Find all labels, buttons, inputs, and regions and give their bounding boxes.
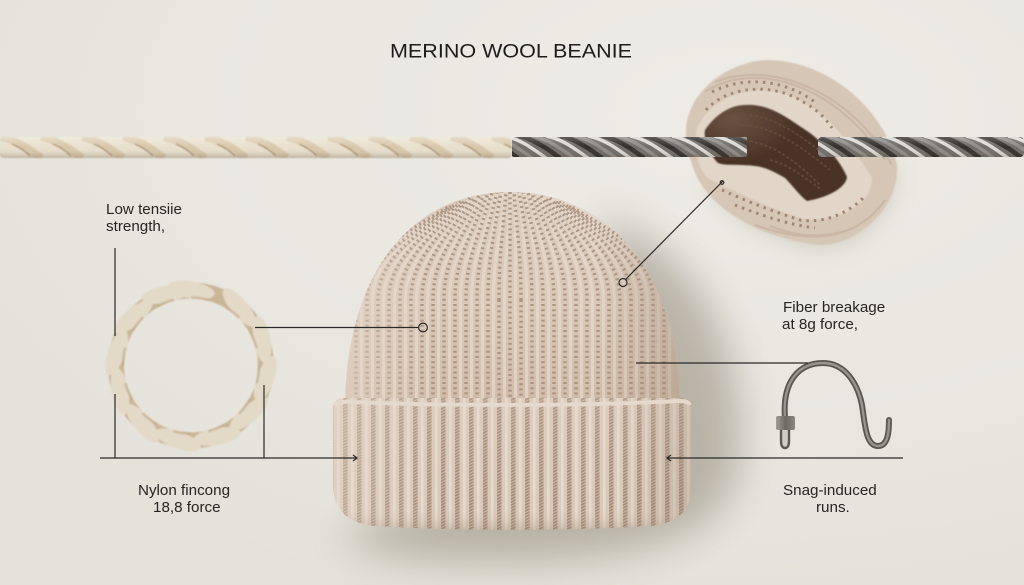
right arrow to cuff [667,455,903,461]
title: MERINO WOOL BEANIE [390,42,632,62]
crown stitch dots [356,192,664,410]
twisted fibre ring [100,277,282,456]
cuff shading [333,398,691,530]
callout: fiber breakage: Fiber breakage [783,299,885,316]
small beanie knit rim [696,90,872,220]
beanie cuff [333,398,691,530]
callout: low tensile strength [106,201,182,235]
callout: low tensile strength: strength, [106,218,165,235]
main beanie [333,192,691,530]
ring strands [100,277,282,456]
callout: snag-induced runs: Snag-induced [783,482,877,499]
small beanie diagonal leader [626,181,723,279]
callout: fiber breakage: at 8g force, [782,316,858,333]
callout: nylon fincong: 18,8 force [153,499,221,516]
small beanie shadow [700,165,898,250]
small beanie knit stitches [706,82,864,228]
small beanie body [686,60,897,245]
callout: snag-induced runs: runs. [816,499,850,516]
natural fibre rope [0,137,512,158]
crown side shading [346,232,680,398]
callout: snag-induced runs [783,482,877,516]
left vertical leader bottom [114,394,116,458]
small beanie end circle [720,181,724,184]
hook highlight [785,363,889,446]
callout: nylon fincong [138,482,230,516]
diagonal leader end circle [619,278,627,286]
ring to beanie leader [255,326,418,328]
hook collar [776,416,795,430]
left vertical leader top [114,248,116,336]
beanie shadow [345,215,740,562]
hook to beanie leader [636,362,808,364]
beanie crown [345,192,680,410]
steel cable shading [512,137,1024,157]
right ring vertical leader [263,385,265,458]
cuff top edge [335,401,690,405]
crown rib highlights [362,192,670,410]
bottom left arrow to cuff [100,455,357,461]
callout: low tensile strength: Low tensiie [106,201,182,218]
small beanie inner knit [735,115,830,190]
steel cable right section [818,137,1024,157]
callout: fiber breakage [782,299,885,333]
crown knit ribs [345,192,680,410]
callout: nylon fincong: Nylon fincong [138,482,230,499]
hook wire [785,363,889,446]
small beanie with steel cable threaded through [512,60,1024,250]
small beanie opening [705,105,847,201]
steel cable left section [512,137,747,157]
ring inner shade [123,298,259,434]
leader lines and arrows [100,181,903,461]
cuff vertical shading [333,398,691,530]
steel hook [776,363,889,448]
ring leader end circle [419,323,427,332]
small beanie outer ribs [705,75,892,237]
hook eye [781,430,789,448]
